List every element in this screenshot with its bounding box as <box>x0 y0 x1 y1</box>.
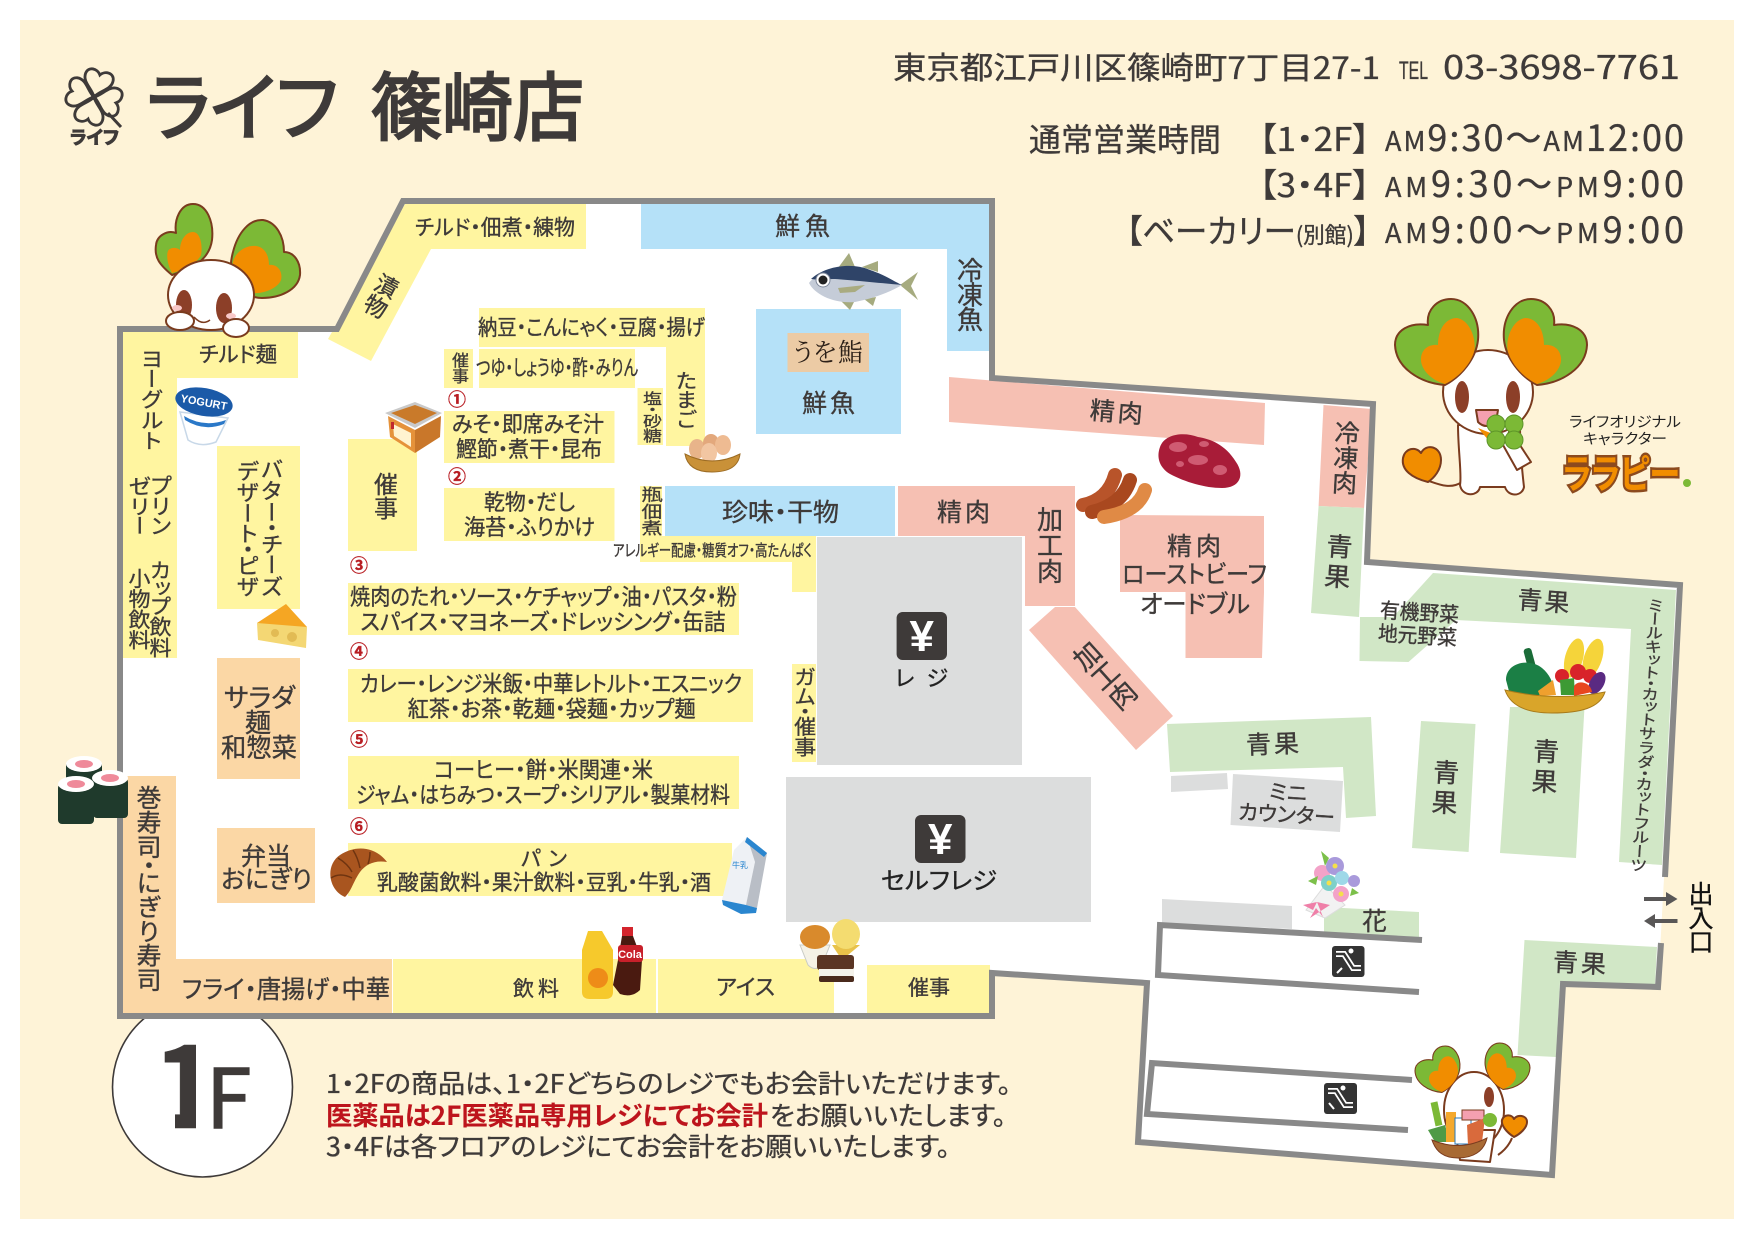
panel: コーヒー: ジャム・はちみつ・スープ・シリアル・製菓材料 <box>356 783 730 808</box>
marker ②: ② <box>448 467 466 487</box>
panel: bento: おにぎり <box>221 866 312 894</box>
panel: 瓶佃煮 and allergy shelf: アレルギー配慮・糖質オフ・高たんぱく <box>613 542 812 560</box>
panel: chilled left wall: ヨーグルト <box>137 348 163 450</box>
panel: パン <box>348 843 732 896</box>
opening hours: AM9:00〜PM9:00 <box>1385 202 1684 254</box>
marker ④: ④ <box>350 642 368 662</box>
note text <box>326 1064 1011 1164</box>
panel: 精肉 ローストビーフ オードブル: オードブル <box>1140 591 1250 619</box>
panel: レジ: ¥ <box>910 612 935 661</box>
floor badge: 1F: 1 <box>153 999 219 1161</box>
panel: 精肉 ローストビーフ オードブル <box>1120 515 1267 658</box>
panel: 青果 vertical near wall: 青果 <box>1320 532 1354 590</box>
panel: 精肉 ローストビーフ オードブル: 精肉 <box>1167 533 1221 561</box>
illustration: yogurt: YOGURT <box>180 393 228 413</box>
panel: chilled left wall: カップ飲料 <box>146 560 172 658</box>
panel: 催事 big: 催事 <box>370 472 398 520</box>
illustration: cheese <box>257 604 307 648</box>
panel: パン: パン <box>521 848 567 871</box>
panel: ミニカウンター: カウンター <box>1237 801 1336 830</box>
panel: 鮮魚 wall and 冷凍魚: 鮮魚 <box>775 213 830 241</box>
panel: チルド・佃煮・練物 and 漬物 <box>328 204 586 361</box>
panel: chilled left wall: 小物飲料 <box>126 568 150 650</box>
panel: 珍味・干物 <box>665 486 895 536</box>
illustration: juice bottle <box>582 931 613 999</box>
note text: 3・4Fは各フロアのレジにてお会計をお願いいたします。 <box>326 1127 950 1164</box>
opening hours <box>1029 110 1684 254</box>
illustration: fish <box>809 253 918 310</box>
panel: セルフレジ: セルフレジ <box>881 868 997 895</box>
panel: butter cheese dessert: デザート・ピザ <box>233 460 259 597</box>
logo: Life clover: ライフ <box>70 128 119 148</box>
panel: 瓶佃煮 and allergy shelf: 瓶佃煮 <box>639 486 662 536</box>
illustration: ice cream <box>800 919 860 982</box>
panel: コーヒー: コーヒー・餅・米関連・米 <box>434 758 653 783</box>
illustration: meat <box>1158 434 1240 488</box>
illustration: mascot with basket <box>1415 1043 1530 1162</box>
illustration: miso <box>385 402 442 453</box>
panel: つゆ <box>476 349 638 388</box>
panel: 青果 L-shaped <box>1167 717 1376 818</box>
panel: 青果 bottom right <box>1518 940 1657 1057</box>
panel: みそ: みそ・即席みそ汁 <box>452 412 604 437</box>
panel: 青果 top right with meal kit: ミールキット・カットサラダ・カットフルーツ <box>1628 597 1666 872</box>
note text: 医薬品は2F医薬品専用レジにてお会計 <box>326 1096 768 1133</box>
illustration: cola bottle: Cola <box>618 949 643 961</box>
panel: 塩・砂糖: 塩・砂糖 <box>640 391 662 443</box>
panel: salad: 和惣菜 <box>221 733 297 763</box>
panel: butter cheese dessert <box>217 446 300 609</box>
panel: 焼肉のたれ <box>348 583 739 635</box>
opening hours: 【3・4F】 <box>1259 159 1370 207</box>
panel: 乾物 <box>444 488 614 541</box>
escalator walls upper <box>1158 925 1422 992</box>
panel: chilled left wall: チルド麺 <box>199 343 277 367</box>
panel: 乾物: 海苔・ふりかけ <box>464 515 595 540</box>
panel: 青果 top right with meal kit: 地元野菜 <box>1377 623 1458 650</box>
panel: カレー: カレー・レンジ米飯・中華レトルト・エスニック <box>360 672 742 697</box>
panel: セルフレジ <box>786 777 1091 922</box>
panel: 精肉 and 加工肉: 精肉 <box>937 499 990 527</box>
panel: チルド・佃煮・練物 and 漬物: 漬物 <box>357 269 402 322</box>
title <box>146 67 584 150</box>
panel: レジ <box>817 537 1022 765</box>
panel: アイス <box>658 959 834 1013</box>
address and telephone: 東京都江戸川区篠崎町7丁目27-1 <box>893 43 1380 88</box>
icon: escalator down <box>1324 1083 1357 1114</box>
label: 出入口: 出入口 <box>1685 881 1714 954</box>
illustration: milk carton <box>722 837 767 914</box>
panel: 鮮魚 island with sign <box>756 309 901 434</box>
panel: butter cheese dessert: バター・チーズ <box>257 459 283 597</box>
panel: salad: 麺 <box>245 708 271 738</box>
icon: escalator up <box>1332 946 1364 977</box>
panel: 精肉 slanted <box>949 377 1265 445</box>
panel: アイス: アイス <box>716 975 775 1000</box>
panel: salad: サラダ <box>224 683 296 713</box>
panel: 珍味・干物: 珍味・干物 <box>722 499 839 527</box>
panel: 焼肉のたれ: スパイス・マヨネーズ・ドレッシング・缶詰 <box>360 610 726 635</box>
caption: original character <box>1569 415 1681 448</box>
panel: bento <box>217 828 315 903</box>
logo: ララピー: ララピー <box>1563 453 1680 497</box>
marker ⑤: ⑤ <box>350 730 368 750</box>
note text: をお願いいたします。 <box>770 1096 1006 1133</box>
panel: ガム・催事: ガム・催事 <box>791 666 816 757</box>
panel: 加工肉 diagonal: 加工肉 <box>1065 637 1141 717</box>
illustration: vegetable basket <box>1505 636 1609 713</box>
title: ライフ <box>146 67 338 150</box>
illustration: peeking mascot <box>156 204 300 337</box>
floor badge: 1F <box>112 1019 294 1178</box>
panel: 青果 column 3 <box>1500 707 1584 858</box>
panel: ミニカウンター: ミニ <box>1268 781 1308 806</box>
panel: 青果 bottom right: 青果 <box>1552 949 1607 979</box>
panel: 花 <box>1324 907 1419 937</box>
note text: 1・2Fの商品は、1・2Fどちらのレジでもお会計いただけます。 <box>326 1064 1011 1101</box>
illustration: yogurt <box>173 383 235 445</box>
marker ①: ① <box>448 390 466 410</box>
panel: 塩・砂糖 <box>638 388 663 445</box>
panel: 鮮魚 wall and 冷凍魚 <box>641 204 990 351</box>
panel: 青果 L-shaped: 青果 <box>1246 730 1300 760</box>
panel: コーヒー <box>348 756 739 809</box>
escalator walls lower <box>1147 1063 1412 1130</box>
panel: small grey counter <box>1171 773 1228 792</box>
panel: 青果 top right with meal kit <box>1360 573 1676 872</box>
panel: ミニカウンター <box>1230 774 1343 832</box>
marker ⑥: ⑥ <box>350 817 368 837</box>
illustration: sausages <box>1083 475 1145 517</box>
panel: 精肉 slanted: 精肉 <box>1089 397 1144 429</box>
illustration: sushi rolls <box>58 756 128 824</box>
illustration: milk carton: 牛乳 <box>732 860 748 870</box>
illustration: croissant <box>330 849 387 897</box>
panel: 青果 top right with meal kit: 有機野菜 <box>1379 600 1460 627</box>
panel: 精肉 and 加工肉: 加工肉 <box>1034 506 1064 584</box>
title: 篠崎店 <box>371 67 584 150</box>
opening hours: 通常営業時間 <box>1029 122 1221 158</box>
panel: 冷凍肉 <box>1319 405 1372 508</box>
panel: みそ <box>444 411 614 463</box>
panel: 青果 column 2: 青果 <box>1428 758 1460 816</box>
caption: original character: ライフオリジナル <box>1569 415 1681 431</box>
panel: 納豆 and たまご: たまご <box>672 371 698 429</box>
panel: チルド・佃煮・練物 and 漬物: チルド・佃煮・練物 <box>415 216 575 240</box>
panel: 催事 small: 催事 <box>449 352 468 384</box>
panel: みそ: 鰹節・煮干・昆布 <box>456 437 602 462</box>
panel: sushi and fried food: フライ・唐揚げ・中華 <box>182 976 390 1004</box>
panel: 乾物: 乾物・だし <box>484 490 575 515</box>
panel: 精肉 ローストビーフ オードブル: ローストビーフ <box>1122 561 1267 589</box>
panel: レジ: レジ <box>895 666 948 691</box>
panel: bento: 弁当 <box>241 843 291 871</box>
panel: chilled left wall: ゼリー <box>125 475 151 535</box>
panel: 花: 花 <box>1362 908 1387 936</box>
logo: Life clover <box>64 67 124 148</box>
panel: 青果 top right with meal kit: 青果 <box>1517 586 1570 618</box>
panel: 納豆 and たまご <box>478 308 706 446</box>
opening hours: AM9:30〜PM9:00 <box>1385 156 1684 208</box>
illustration: flowers <box>1303 851 1360 918</box>
illustration: cola bottle <box>613 927 643 995</box>
panel: パン: 乳酸菌飲料・果汁飲料・豆乳・牛乳・酒 <box>377 871 711 895</box>
panel: sushi and fried food <box>123 776 392 1013</box>
panel: 催事 big <box>348 439 417 551</box>
panel: chilled left wall <box>123 332 298 658</box>
panel: 飲料: 飲料 <box>513 978 559 1001</box>
floor interior <box>120 201 1680 1175</box>
caption: original character: キャラクター <box>1583 431 1667 448</box>
opening hours: AM9:30〜AM12:00 <box>1385 110 1684 162</box>
panel: カレー <box>348 669 753 722</box>
panel: 鮮魚 wall and 冷凍魚: 冷凍魚 <box>954 257 984 332</box>
panel: 青果 column 2 <box>1412 721 1476 852</box>
illustration: eggs in basket <box>685 434 740 472</box>
address and telephone <box>893 41 1680 89</box>
panel: つゆ: つゆ・しょうゆ・酢・みりん <box>476 357 638 380</box>
panel: 焼肉のたれ: 焼肉のたれ・ソース・ケチャップ・油・パスタ・粉 <box>350 585 737 610</box>
panel: grey area above escalator <box>1162 899 1292 929</box>
panel: 冷凍肉: 冷凍肉 <box>1328 419 1360 496</box>
opening hours: 【ベーカリー(別館)】 <box>1126 205 1370 253</box>
panel: 催事 bottom <box>867 965 990 1013</box>
panel: 納豆 and たまご: 納豆・こんにゃく・豆腐・揚げ <box>478 316 706 340</box>
address and telephone: 03-3698-7761 <box>1443 41 1680 89</box>
panel: chilled left wall: プリン <box>146 475 172 535</box>
panel: 青果 vertical near wall <box>1311 506 1364 617</box>
arrows: entrance <box>1644 892 1678 928</box>
panel: 瓶佃煮 and allergy shelf <box>613 486 816 592</box>
floor badge: 1F: F <box>206 1033 251 1152</box>
panel: 青果 column 3: 青果 <box>1528 737 1560 795</box>
panel: カレー: 紅茶・お茶・乾麺・袋麺・カップ麺 <box>408 697 696 722</box>
panel: sushi and fried food: 巻寿司・にぎり寿司 <box>133 785 162 992</box>
panel: 鮮魚 island with sign: うを鮨 <box>793 333 863 369</box>
address and telephone: TEL <box>1399 57 1428 85</box>
panel: salad <box>217 658 300 779</box>
illustration: mascot with clover <box>1395 299 1587 494</box>
panel: セルフレジ: ¥ <box>928 815 953 864</box>
panel: 催事 small <box>444 349 473 388</box>
panel: 飲料 <box>393 959 656 1013</box>
panel: 催事 bottom: 催事 <box>908 977 950 1000</box>
marker ③: ③ <box>350 556 368 576</box>
panel: 加工肉 diagonal <box>1029 607 1173 750</box>
opening hours: 【1・2F】 <box>1259 113 1370 161</box>
building walls <box>120 201 1680 1175</box>
panel: 精肉 and 加工肉 <box>898 486 1075 606</box>
panel: 鮮魚 island with sign: 鮮魚 <box>802 390 855 418</box>
